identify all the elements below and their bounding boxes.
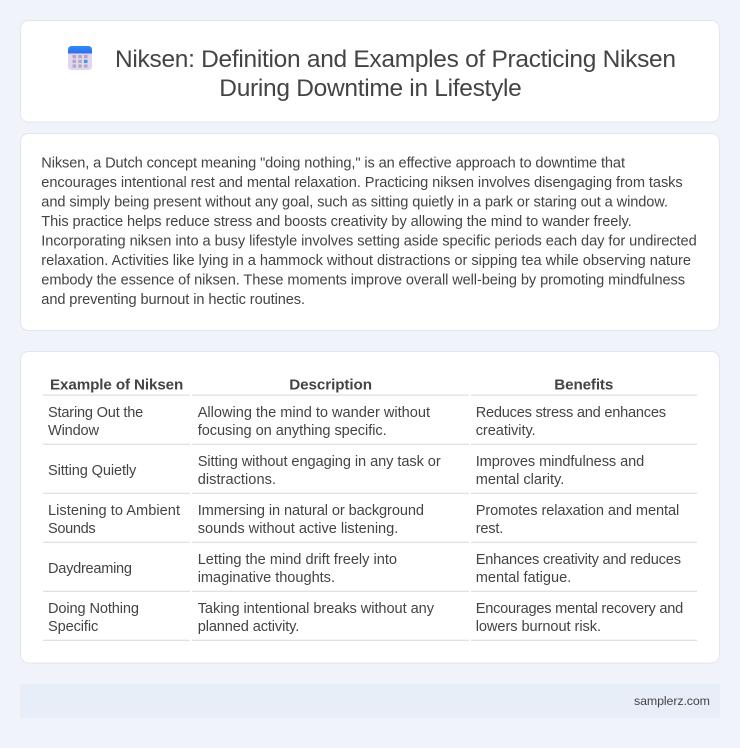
table row: listening to ambient sounds: rest.: [476, 521, 503, 537]
text block: niksen overview: and simply being present without any goal, such as sitting quietly in a park or staring out a window.: [41, 194, 668, 210]
table row: staring out the window: Window: [48, 423, 99, 439]
table row: doing nothing specific: Doing Nothing: [48, 601, 139, 617]
table row: staring out the window: focusing on anything specific.: [198, 423, 387, 439]
table row: daydreaming: [43, 552, 697, 592]
table header row: Description: [289, 376, 372, 394]
panel: description: [20, 134, 720, 330]
table header row: [43, 376, 697, 396]
title: Niksen: Definition and Examples of Practicing Niksen: [115, 46, 676, 73]
panel: title header: [20, 20, 720, 122]
icon: calendar: [68, 46, 92, 70]
table row: sitting quietly: mental clarity.: [476, 472, 564, 488]
table row: sitting quietly: Sitting Quietly: [48, 463, 137, 479]
table row: staring out the window: Reduces stress and enhances: [476, 405, 666, 421]
table row: daydreaming: Enhances creativity and reduces: [476, 552, 681, 568]
table row: listening to ambient sounds: Sounds: [48, 521, 96, 537]
table row: listening to ambient sounds: sounds without active listening.: [198, 521, 398, 537]
footer credit: samplerz.com: [634, 694, 710, 708]
text block: niksen overview: Niksen, a Dutch concept meaning "doing nothing," is an effective approach to downtime that: [41, 156, 625, 172]
text block: niksen overview: Incorporating niksen into a busy lifestyle involves setting aside specific periods each day for undirected: [41, 234, 697, 250]
text block: niksen overview: relaxation. Activities like lying in a hammock without distractions or sipping tea while observing nature: [41, 253, 691, 269]
table row: listening to ambient sounds: Listening to Ambient: [48, 503, 180, 519]
table row: doing nothing specific: planned activity.: [198, 619, 299, 635]
table row: listening to ambient sounds: [43, 503, 697, 543]
text block: niksen overview: This practice helps reduce stress and boosts creativity by allowing the mind to wander freely.: [41, 214, 632, 230]
table row: daydreaming: Daydreaming: [48, 561, 132, 577]
table row: daydreaming: Letting the mind drift freely into: [198, 552, 397, 568]
text block: niksen overview: encourages intentional rest and mental relaxation. Practicing niksen involves disengaging from tasks: [41, 175, 683, 191]
table row: listening to ambient sounds: Immersing in natural or background: [198, 503, 424, 519]
table row: doing nothing specific: [43, 601, 697, 641]
text block: niksen overview: embody the essence of niksen. These moments improve overall well-being by promoting mindfulness: [41, 272, 685, 288]
table row: staring out the window: creativity.: [476, 423, 536, 439]
table row: sitting quietly: Sitting without engaging in any task or: [198, 454, 441, 470]
table row: sitting quietly: Improves mindfulness and: [476, 454, 644, 470]
table row: daydreaming: imaginative thoughts.: [198, 570, 335, 586]
text block: niksen overview: [41, 156, 697, 308]
footer bar: [20, 684, 720, 718]
title: [115, 46, 676, 102]
text block: niksen overview: and preventing burnout in hectic routines.: [41, 292, 305, 308]
title: During Downtime in Lifestyle: [219, 75, 522, 102]
table header row: Example of Niksen: [50, 376, 183, 394]
table row: staring out the window: Allowing the mind to wander without: [198, 405, 430, 421]
table header row: Benefits: [554, 376, 613, 394]
table row: staring out the window: Staring Out the: [48, 405, 143, 421]
table row: doing nothing specific: Taking intentional breaks without any: [198, 601, 435, 617]
table row: doing nothing specific: Encourages mental recovery and: [476, 601, 683, 617]
table row: doing nothing specific: Specific: [48, 619, 98, 635]
panel: examples table: [20, 352, 720, 663]
table row: staring out the window: [43, 405, 697, 445]
table row: doing nothing specific: lowers burnout risk.: [476, 619, 601, 635]
table row: sitting quietly: [43, 454, 697, 494]
table row: sitting quietly: distractions.: [198, 472, 276, 488]
table row: listening to ambient sounds: Promotes relaxation and mental: [476, 503, 679, 519]
table row: daydreaming: mental fatigue.: [476, 570, 571, 586]
